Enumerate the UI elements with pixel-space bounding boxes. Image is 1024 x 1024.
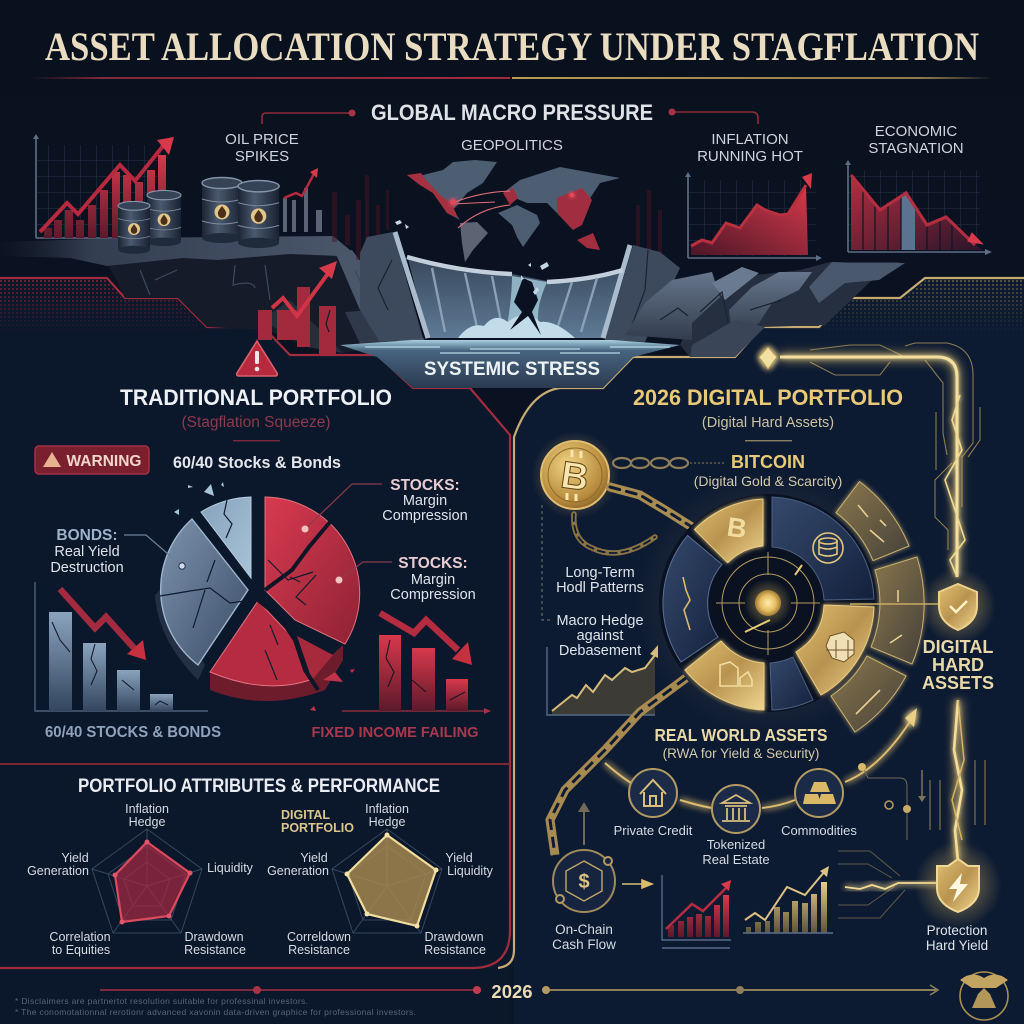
disclaimers: * The conomotationnal rerotionr advanced xavonin data-driven graphice for professional investors. [15,1007,416,1017]
arrow: cash flow to chart [622,880,652,888]
labels: left of wheel: Macro Hedge [556,613,644,629]
icon: tokenized real estate [702,785,770,867]
badge: warning [35,446,149,474]
icon: private credit [614,769,693,838]
connector glow [780,357,958,860]
labels: macro pressures [225,123,964,165]
small circuit node and arrow [858,763,926,840]
icon: bitcoin coin: B [558,454,591,500]
labels: left of wheel: Debasement [559,643,641,659]
circuit traces [810,343,985,830]
heading: traditional portfolio: (Stagflation Squeeze) [181,414,331,431]
labels: macro pressures: ECONOMIC [875,123,957,140]
segment: left navy [663,536,722,662]
outer segment lower [831,656,906,732]
radar chart: traditional: Inflation [125,802,169,816]
glowing connector [780,357,965,862]
illustration: cracked dam [340,220,680,388]
callout: stocks lower: STOCKS: [398,555,468,572]
rocks right [625,262,905,357]
segment: bitcoin [694,499,763,563]
disclaimers: * Disclaimers are partnertot resolution suitable for professinal investors. [15,996,308,1006]
text: real world assets: REAL WORLD ASSETS [654,725,828,745]
icon: private credit: Private Credit [614,823,693,838]
icon: on-chain cash flow: Cash Flow [552,937,616,952]
heading: digital portfolio: (Digital Hard Assets) [702,415,834,431]
chart: macro hedge growth [547,645,658,715]
dam face [407,255,623,338]
icon: on-chain cash flow: $ [578,871,590,893]
icon: wheel route [683,577,690,630]
callout: stocks lower: Compression [390,587,476,603]
label: digital hard assets: ASSETS [922,673,994,693]
radar chart: traditional [27,802,254,957]
disclaimers [15,996,416,1017]
labels under traditional charts: FIXED INCOME FAILING [312,724,478,741]
connector right [672,112,758,124]
labels: macro pressures: RUNNING HOT [697,148,803,165]
map: world geopolitics [407,160,620,262]
segment: lower navy [770,657,813,710]
callout: bonds: Destruction [50,560,124,576]
callout: stocks top [302,477,468,532]
radar chart: digital: PORTFOLIO [281,821,354,835]
lightning to shield [838,851,940,918]
radar chart: digital: Resistance [424,943,486,957]
icon: shield with check [850,568,996,644]
heading: global macro pressure: GLOBAL MACRO PRESSURE [371,100,653,125]
radar chart: digital: Resistance [288,943,350,957]
callout: stocks top: Margin [403,493,447,509]
labels: macro pressures: GEOPOLITICS [461,137,563,154]
chart: economic stagnation [845,160,992,255]
heading: digital portfolio: 2026 DIGITAL PORTFOLIO [633,385,903,410]
icon: wheel bitcoin: B [725,512,749,544]
callout: bonds: Real Yield [54,544,120,560]
icon: wheel database [813,533,843,563]
chart: oil price line and bars [33,134,174,238]
icon: tokenized real estate: Tokenized [707,837,765,852]
icon: on-chain cash flow [552,802,616,952]
connector line [780,357,965,862]
radar chart: digital: Yield [300,851,328,865]
gold arc with arrow [605,708,917,808]
chart: fixed income bars falling [342,613,491,714]
radar chart: traditional: Yield [61,851,89,865]
dam abutments [360,232,423,342]
chart: inflation running hot [685,172,822,261]
label: digital hard assets: DIGITAL [923,637,993,657]
icon: tokenized real estate: Real Estate [702,852,770,867]
dam pillars [395,232,428,338]
labels: macro pressures: INFLATION [711,131,789,148]
radar chart: digital: DIGITAL [281,808,330,822]
label: digital hard assets: HARD [932,655,984,675]
banner: systemic stress: SYSTEMIC STRESS [424,358,600,380]
badge: warning: WARNING [67,453,141,470]
text: bitcoin: (Digital Gold & Scarcity) [694,473,842,489]
labels: left of wheel: Long-Term [565,565,635,581]
icon: diamond node [759,347,777,369]
text: 60/40 stocks and bonds: 60/40 Stocks & Bonds [173,454,341,472]
icon: footer logo [960,972,1008,1020]
radar chart: digital: Hedge [369,815,405,829]
radar chart: traditional: Hedge [129,815,165,829]
radar chart: traditional: Drawdown [184,930,244,944]
text: bitcoin: BITCOIN [731,452,805,472]
spray [458,315,575,338]
radar chart: traditional: Liquidity [207,861,254,875]
chart: red growth bars [662,875,731,948]
radar chart: digital [267,802,494,957]
timeline [100,981,938,1002]
wheel hub [716,552,820,655]
radar chart: traditional: Generation [27,864,89,878]
radar chart: traditional: Correlation [49,930,111,944]
icon: shield with bolt [914,841,1002,929]
labels: macro pressures: OIL PRICE [225,131,299,148]
heading: digital portfolio [633,385,903,441]
chart: digital radial wheel [633,468,924,738]
labels: macro pressures: STAGNATION [868,140,964,157]
section: global macro pressure [262,100,758,125]
chain: wheel to cash flow [550,678,686,855]
callout: bonds: BONDS: [56,527,118,544]
timeline: 2026 [491,981,533,1002]
chart: small oil spike [283,168,662,260]
labels: left of wheel: against [577,628,623,644]
heading: traditional portfolio [120,385,392,441]
icon: bitcoin coin [531,431,619,519]
text: real world assets: (RWA for Yield & Security) [663,746,819,761]
connector left [262,113,352,124]
outer segment middle [871,557,924,664]
radar chart: digital: Inflation [365,802,409,816]
callout: stocks lower: Margin [411,572,455,588]
radar chart: digital: Yield [445,851,473,865]
radar chart: traditional: Resistance [184,943,246,957]
segment: right gold [796,605,874,695]
labels under traditional charts [45,724,478,741]
icon: commodities: Commodities [781,823,857,838]
panel: traditional portfolio background [0,278,510,1024]
callout: stocks top: Compression [382,508,468,524]
segment: top right navy [772,497,874,600]
text: real world assets [654,725,828,761]
outer segment upper [836,482,909,561]
chart: cracked pie [155,482,360,711]
icon: oil barrels [118,178,279,254]
callout: bonds [50,527,185,576]
icon: on-chain cash flow: On-Chain [555,922,613,937]
labels: macro pressures: SPIKES [235,148,289,165]
radar chart: traditional: to Equities [52,943,110,957]
crack [510,278,541,335]
panel: digital portfolio background [498,278,1024,1024]
label: protection hard yield: Protection [927,923,987,938]
label: digital hard assets [922,637,994,693]
chart: gold growth bars [743,866,833,933]
radar chart: digital: Drawdown [424,930,484,944]
chart: cracked red bars on cliff [258,261,337,356]
heading: portfolio attributes: PORTFOLIO ATTRIBUTES & PERFORMANCE [78,775,440,797]
chain: coin to wheel [574,487,692,553]
icon: wheel buildings [720,662,752,686]
label: protection hard yield [926,923,988,953]
segment: lower left gold [685,641,764,710]
radar chart: digital: Liquidity [447,864,494,878]
icon: wheel hexagon blocks [826,632,854,662]
labels: left of wheel [542,505,644,659]
callout: stocks top: STOCKS: [390,477,460,494]
radar chart: digital: Correldown [287,930,351,944]
radar chart: digital: Generation [267,864,329,878]
chain: horizontal from coin [613,458,725,468]
chart: bonds bars falling [35,582,208,711]
labels under traditional charts: 60/40 STOCKS & BONDS [45,724,221,741]
icon: commodities [781,769,857,838]
label: protection hard yield: Hard Yield [926,938,988,953]
labels: left of wheel: Hodl Patterns [556,580,644,596]
icon: warning triangle [237,341,277,376]
text: bitcoin [694,452,842,489]
heading: traditional portfolio: TRADITIONAL PORTFOLIO [120,385,392,410]
water [340,340,680,388]
rock plateau and cliff left [0,236,428,353]
marks on outer segments [856,505,902,714]
callout: stocks lower [336,555,476,603]
